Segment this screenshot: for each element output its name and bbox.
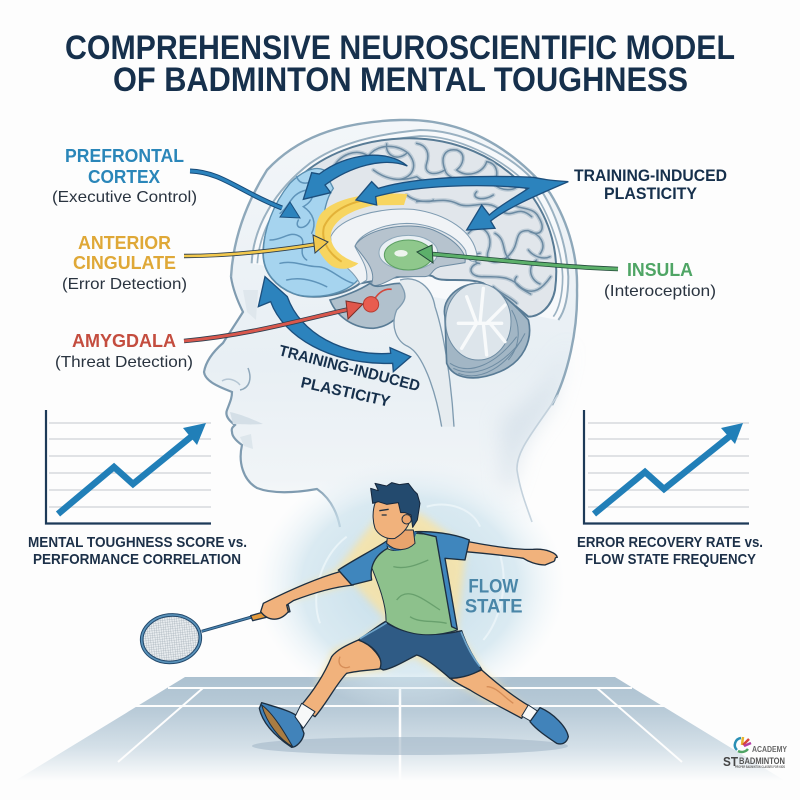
caption: left chart: PERFORMANCE CORRELATION [33, 551, 241, 568]
label: training-induced plasticity right [574, 166, 727, 203]
left shoe [259, 703, 315, 747]
left leg [300, 640, 383, 717]
label: anterior cingulate: (Error Detection) [62, 276, 187, 293]
racket [139, 605, 290, 665]
label: anterior cingulate [62, 232, 187, 293]
prefrontal cortex highlight [263, 169, 361, 296]
logo [723, 737, 787, 769]
skull layers [252, 130, 568, 320]
label: prefrontal cortex: (Executive Control) [52, 189, 197, 206]
shirt [338, 532, 469, 635]
badminton court [0, 677, 800, 790]
pointer: prefrontal cortex [190, 171, 300, 218]
energy swirls [316, 505, 504, 640]
corpus callosum [331, 209, 477, 284]
head [371, 483, 420, 550]
pointer: amygdala [184, 301, 363, 341]
label: training-induced plasticity lower: PLASTICITY [299, 374, 392, 411]
logo fan mark [735, 737, 751, 752]
label: insula: (Interoception) [604, 283, 716, 300]
flow state label: FLOW [468, 577, 518, 598]
deep grey matter [355, 226, 465, 286]
caption: right chart [577, 534, 763, 568]
chart: error recovery vs flow state [584, 410, 749, 524]
left arm [261, 572, 353, 619]
flow state glow [255, 460, 565, 710]
insula [379, 235, 438, 270]
right leg [450, 670, 529, 718]
title [65, 29, 735, 99]
label: anterior cingulate: CINGULATE [73, 252, 176, 273]
caption: right chart: ERROR RECOVERY RATE vs. [577, 534, 763, 551]
anterior cingulate highlight [315, 193, 407, 269]
label: amygdala: AMYGDALA [72, 330, 176, 351]
cortical folds [332, 143, 551, 303]
body halo [263, 513, 527, 710]
label: insula: INSULA [627, 259, 693, 280]
plasticity arrow: lower double-headed [258, 277, 411, 372]
label: amygdala: (Threat Detection) [55, 354, 193, 371]
pointer: insula [417, 245, 618, 269]
chart: mental toughness vs performance [46, 410, 211, 524]
logo: ACADEMY [752, 744, 787, 754]
label: insula [604, 259, 716, 300]
title: OF BADMINTON MENTAL TOUGHNESS [113, 61, 688, 99]
caption: left chart [28, 534, 247, 568]
amygdala [363, 289, 392, 312]
label: anterior cingulate: ANTERIOR [78, 232, 171, 253]
brain [252, 130, 568, 427]
right arm [465, 542, 557, 565]
label: prefrontal cortex [52, 145, 197, 206]
shorts [358, 622, 482, 678]
label: training-induced plasticity right: PLASTICITY [604, 184, 698, 203]
title: COMPREHENSIVE NEUROSCIENTIFIC MODEL [65, 29, 735, 67]
right shoe [522, 705, 568, 744]
brain body [263, 138, 556, 317]
pointer: anterior cingulate [184, 235, 328, 256]
flow state label [465, 577, 522, 618]
label: training-induced plasticity lower: TRAINING-INDUCED [277, 342, 422, 395]
label: amygdala [55, 330, 193, 371]
brainstem [394, 279, 454, 427]
plasticity arrow: upper curved [303, 155, 407, 199]
temporal lobe base [330, 283, 410, 328]
caption: left chart: MENTAL TOUGHNESS SCORE vs. [28, 534, 247, 551]
cerebellum [444, 283, 530, 378]
flow state label: STATE [465, 597, 522, 618]
facial details [222, 368, 250, 390]
caption: right chart: FLOW STATE FREQUENCY [585, 551, 756, 568]
label: prefrontal cortex: PREFRONTAL [65, 145, 184, 166]
logo: ST [723, 754, 738, 769]
label: training-induced plasticity right: TRAINING-INDUCED [574, 166, 727, 185]
logo: BADMINTON [739, 756, 785, 766]
plasticity arrow: forked from right label [356, 176, 568, 230]
head silhouette [204, 120, 577, 527]
player [139, 483, 568, 747]
label: prefrontal cortex: CORTEX [88, 166, 161, 187]
